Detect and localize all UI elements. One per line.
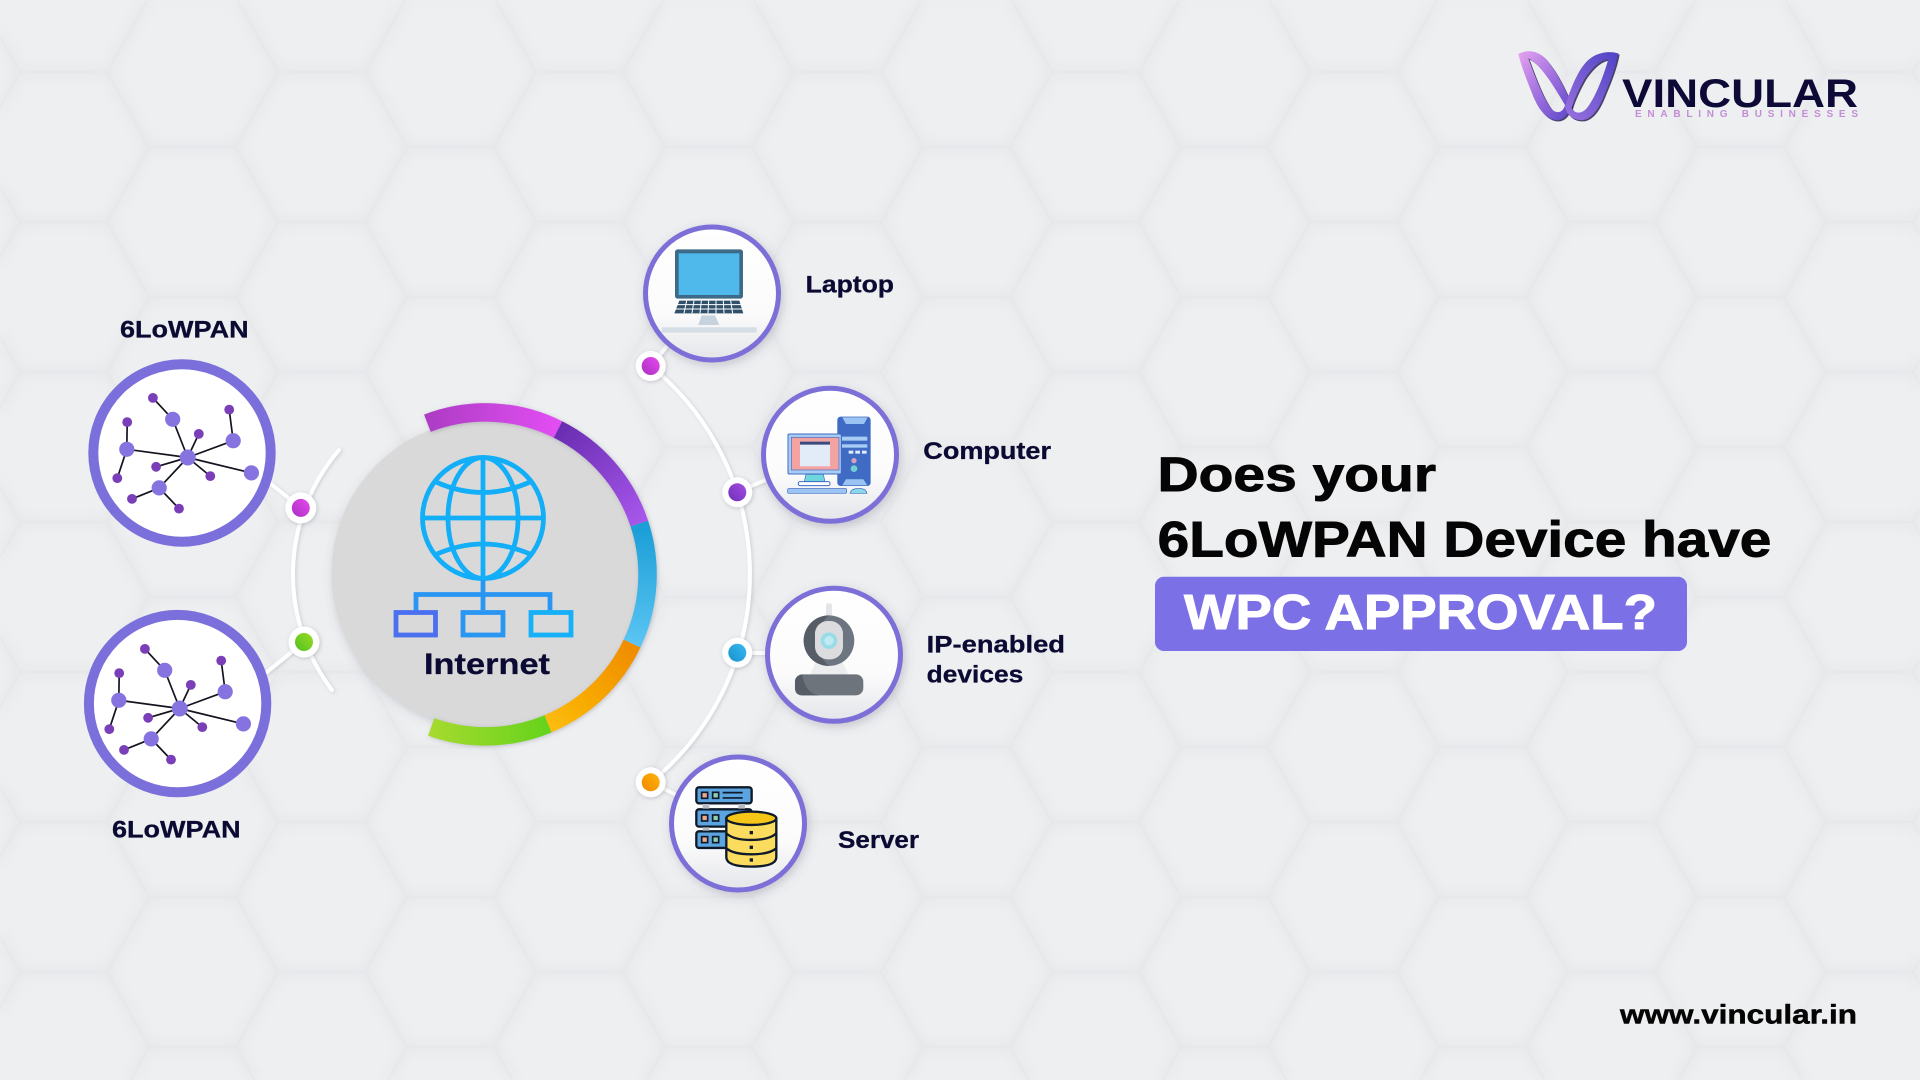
node: purple right	[722, 477, 752, 507]
panel: 6LoWPAN bottom	[89, 615, 266, 844]
node: green left	[288, 626, 320, 658]
node: blue right	[722, 638, 752, 668]
website URL: www.vincular.in	[1619, 999, 1857, 1029]
panel: Server	[672, 757, 919, 890]
icon: globe	[422, 458, 544, 580]
logo wordmark: VINCULAR	[1622, 72, 1858, 116]
node: orange right	[636, 767, 666, 797]
panel: 6LoWPAN top	[93, 316, 271, 542]
icon: Vincular V mark	[1518, 51, 1620, 121]
badge text: WPC APPROVAL?	[1184, 586, 1657, 640]
ring	[768, 588, 900, 721]
headline line 2: 6LoWPAN Device have	[1158, 512, 1771, 568]
label: 6LoWPAN	[112, 816, 241, 844]
hub disc	[332, 420, 638, 727]
headline line 1: Does your	[1158, 449, 1436, 502]
icon: IP camera	[795, 603, 863, 695]
connector: left arc	[267, 450, 339, 690]
icon: laptop	[662, 249, 757, 333]
icon: desktop computer	[788, 417, 871, 493]
panel: Internet hub	[332, 412, 648, 736]
network graph	[112, 393, 259, 514]
label: Server	[838, 827, 919, 854]
panel: Laptop	[646, 227, 894, 360]
label	[927, 632, 1065, 688]
logo: Vincular	[1518, 51, 1858, 121]
hub label: Internet	[424, 648, 550, 681]
logo tagline: ENABLING BUSINESSES	[1635, 109, 1858, 120]
headline	[1158, 449, 1771, 568]
network graph	[104, 644, 251, 764]
label: Computer	[923, 438, 1051, 465]
ring	[93, 364, 271, 542]
ring	[646, 227, 778, 360]
highlight badge: WPC Approval	[1155, 577, 1687, 651]
panel: IP-enabled devices	[768, 588, 1065, 721]
node: pink right	[636, 351, 666, 381]
connector: right arc	[651, 346, 768, 796]
icon: network tree	[396, 580, 571, 635]
segmented colour ring	[427, 412, 648, 736]
label: devices	[927, 661, 1023, 688]
panel: Computer	[764, 388, 1051, 521]
label: Laptop	[806, 272, 894, 299]
ring	[764, 388, 896, 521]
ring	[672, 757, 804, 890]
label: 6LoWPAN	[120, 316, 249, 344]
ring	[89, 615, 266, 792]
label: IP-enabled	[927, 632, 1065, 659]
icon: server with database	[696, 787, 776, 867]
node: pink left	[285, 492, 316, 523]
